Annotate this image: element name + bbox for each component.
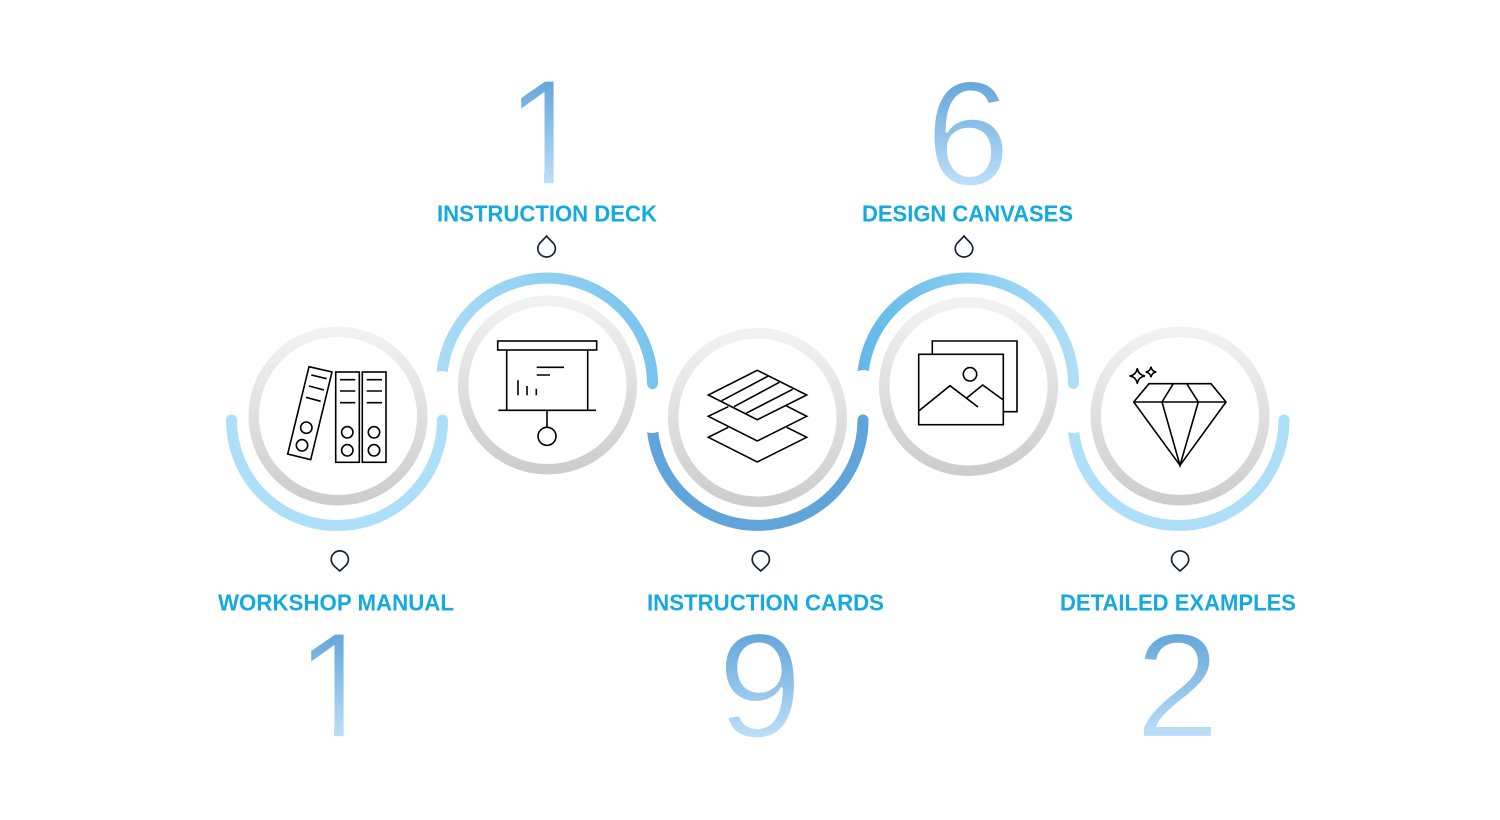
- label: instruction cards: INSTRUCTION CARDS: [647, 590, 884, 616]
- arc: workshop manual: [232, 420, 442, 526]
- arc: design canvases: [862, 278, 1074, 384]
- ring: workshop manual: [254, 332, 422, 500]
- icon: binders: [288, 367, 386, 462]
- step: instruction deck: [437, 48, 657, 384]
- number: instruction cards: 9: [718, 602, 802, 769]
- number: design canvases: 6: [926, 50, 1010, 217]
- label: instruction deck: INSTRUCTION DECK: [437, 200, 657, 226]
- icon: diamond: [1130, 367, 1226, 465]
- icon: stacked cards: [708, 370, 807, 462]
- number: detailed examples: 2: [1135, 602, 1220, 769]
- label: workshop manual: WORKSHOP MANUAL: [218, 590, 454, 616]
- number: workshop manual: 1: [296, 601, 379, 769]
- ring: instruction cards: [673, 333, 842, 502]
- label: detailed examples: DETAILED EXAMPLES: [1060, 590, 1296, 616]
- arc: instruction cards: [652, 420, 863, 525]
- number: instruction deck: 1: [506, 48, 589, 216]
- icon: projection screen: [498, 341, 597, 445]
- drop icon: [538, 236, 555, 257]
- step: detailed examples: [1060, 420, 1296, 769]
- icon: picture frames: [919, 341, 1017, 425]
- drop icon: [955, 236, 973, 257]
- ring: instruction deck: [463, 301, 632, 469]
- ring: design canvases: [884, 302, 1053, 471]
- step: instruction cards: [647, 420, 884, 769]
- pin icon: [1172, 551, 1189, 571]
- arc: detailed examples: [1073, 420, 1284, 526]
- infographic: [218, 80, 1296, 738]
- ring: detailed examples: [1096, 332, 1264, 500]
- label: design canvases: DESIGN CANVASES: [862, 200, 1073, 226]
- arc: instruction deck: [442, 278, 652, 384]
- step: workshop manual: [218, 420, 454, 769]
- pin icon: [752, 551, 769, 571]
- pin icon: [331, 551, 348, 571]
- step: design canvases: [862, 50, 1074, 384]
